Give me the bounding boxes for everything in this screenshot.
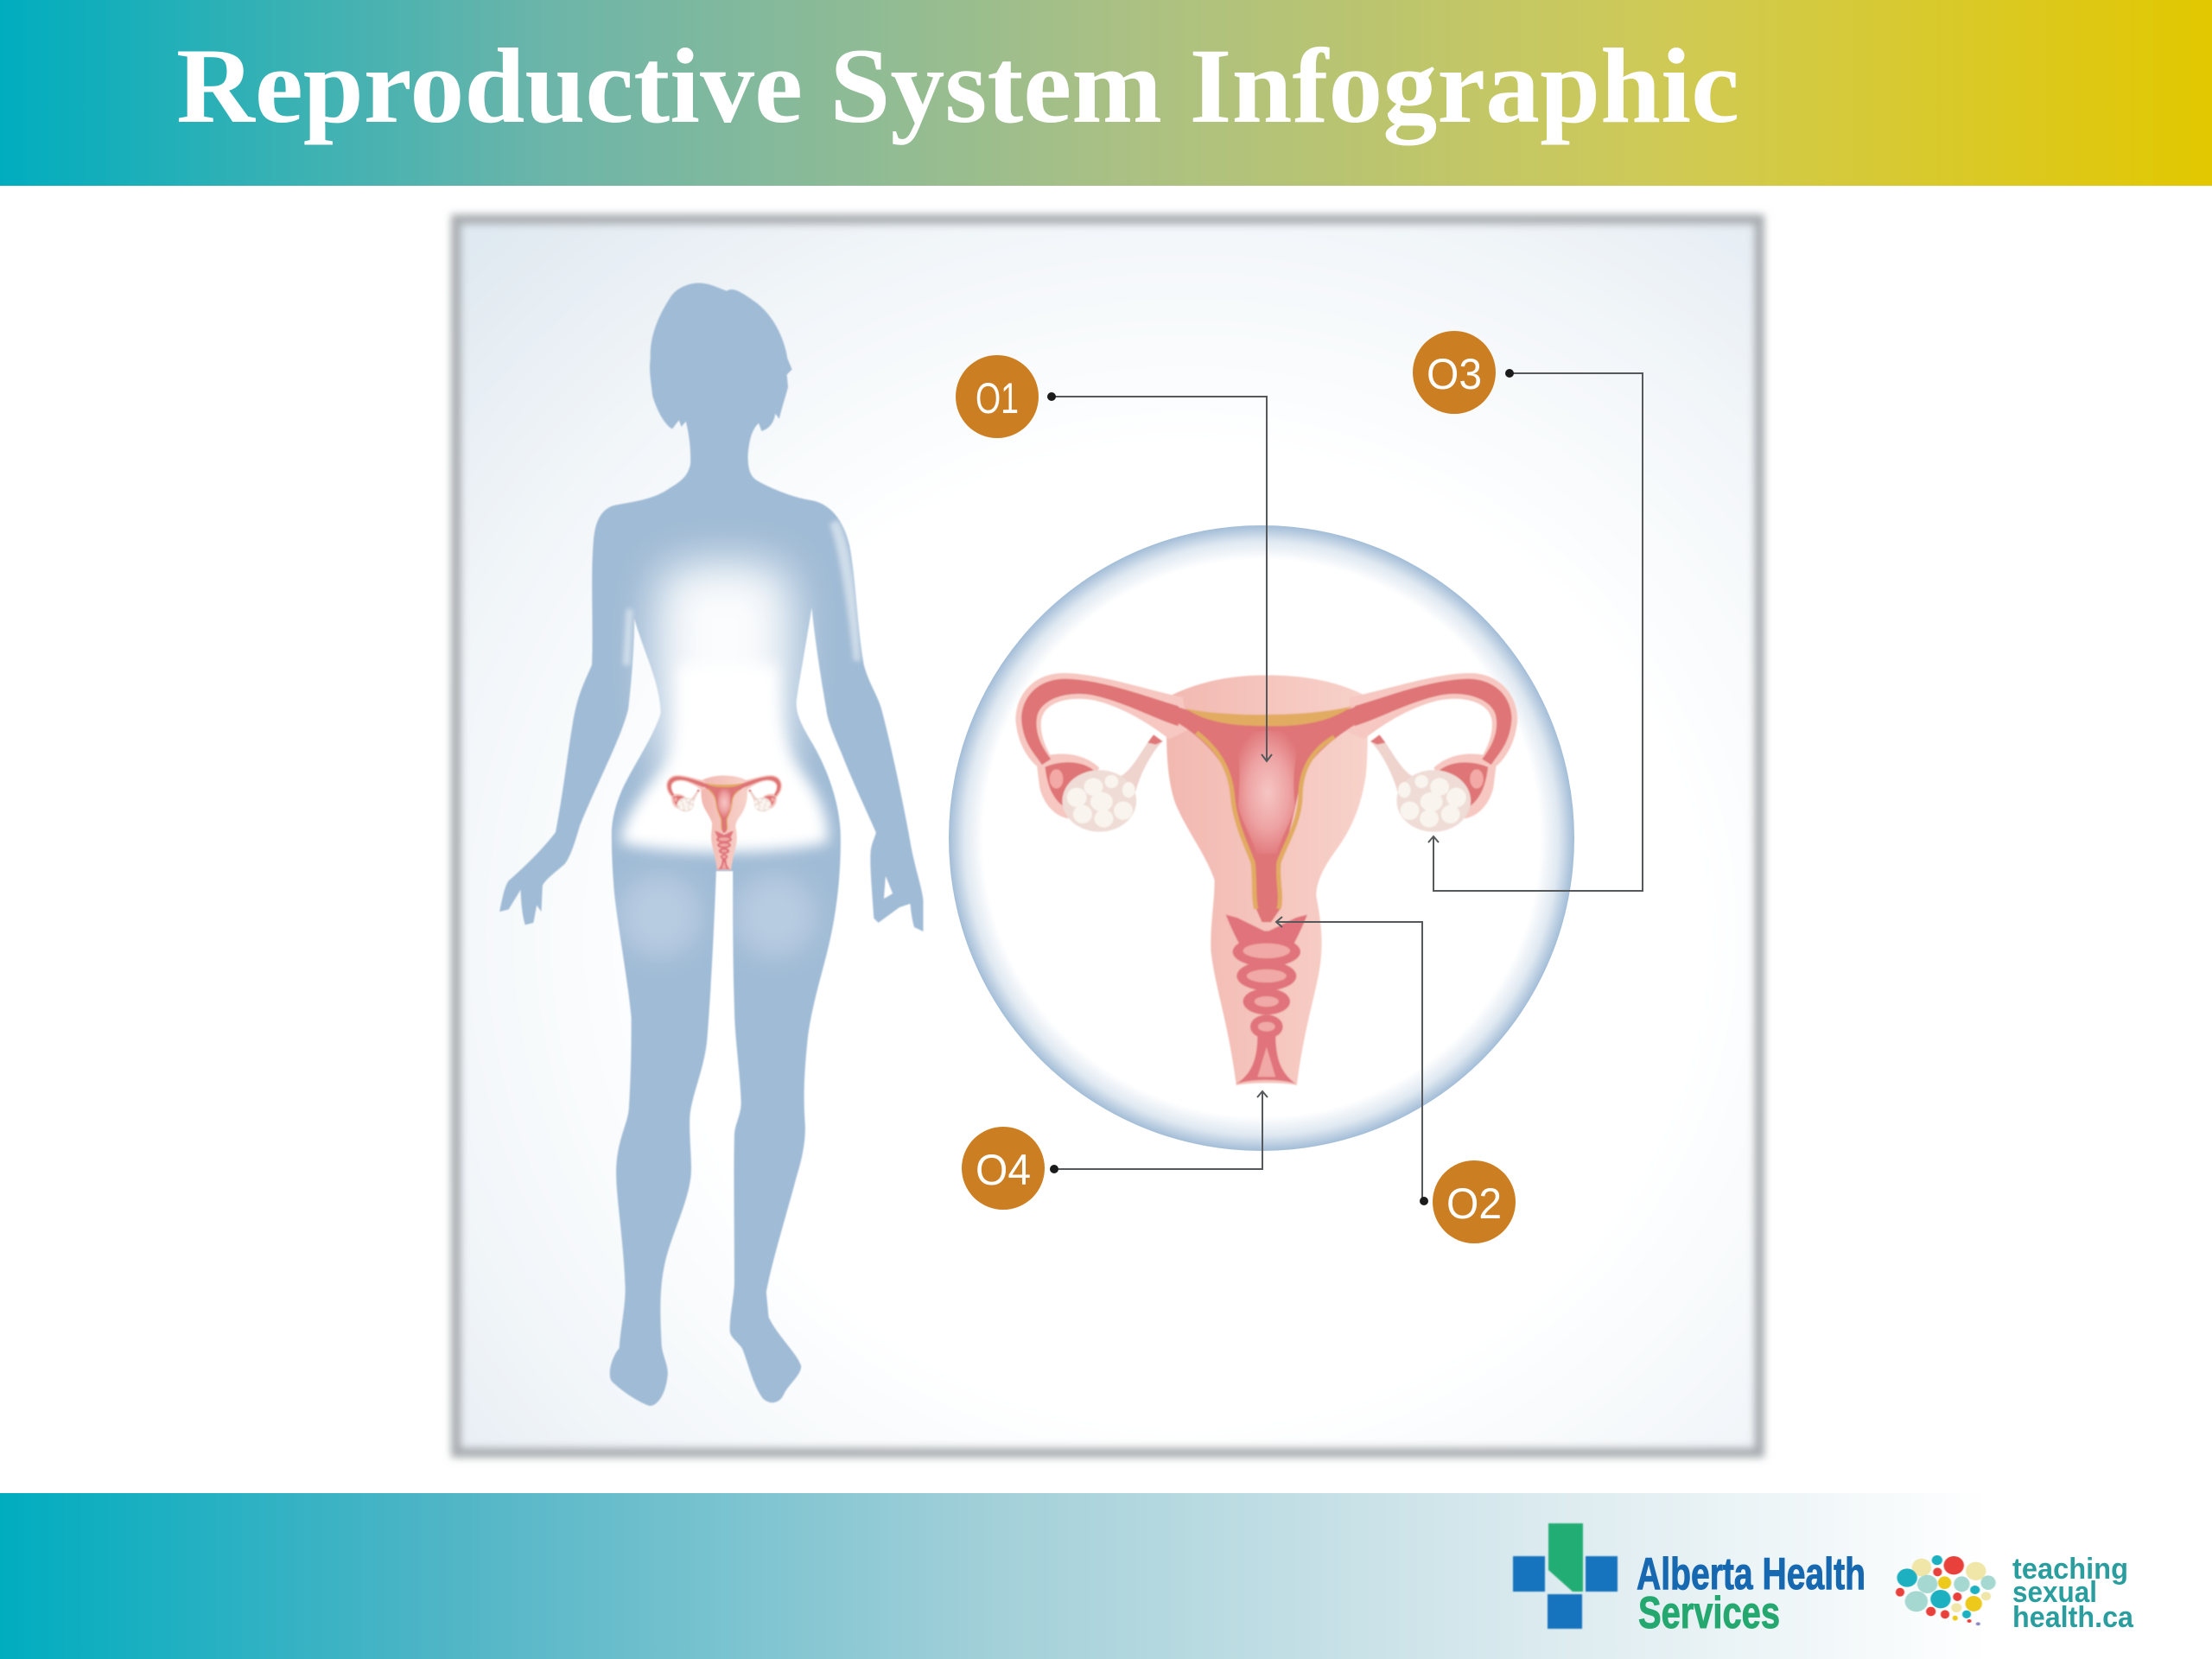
badge O2 [1433, 1160, 1516, 1243]
wordmark line 3: health.ca [2012, 1601, 2134, 1634]
badge O3: O3 [1427, 350, 1482, 398]
logo: teaching sexual health [1896, 1553, 2134, 1634]
figure: female body silhouette [499, 283, 923, 1406]
connector: O2 to cervix [1276, 917, 1428, 1205]
footer banner [0, 1493, 2212, 1659]
mini uterus inside the silhouette [666, 775, 782, 870]
logo: Alberta Health Services [1513, 1523, 1866, 1638]
header banner [0, 0, 2212, 186]
icon: AHS cross [1513, 1523, 1618, 1629]
badge O2: O2 [1446, 1179, 1502, 1228]
wordmark line 2: sexual [2012, 1576, 2097, 1609]
panel: illustration frame [456, 219, 1759, 1452]
badge O1: O1 [976, 374, 1019, 423]
enlarged view circle [949, 525, 1574, 1151]
badge O4 [962, 1127, 1045, 1210]
title: Reproductive System Infographic [176, 27, 1739, 146]
wordmark line 1: Alberta Health [1637, 1549, 1866, 1599]
connector: O3 to ovary [1428, 369, 1643, 891]
connector: O4 to vaginal opening [1050, 1091, 1268, 1173]
icon: brain of coloured dots [1896, 1555, 1996, 1625]
connector: O1 to uterus cavity [1047, 392, 1272, 761]
large uterus diagram [1015, 673, 1517, 1085]
badge O4: O4 [976, 1146, 1031, 1194]
wordmark line 1: teaching [2012, 1553, 2128, 1586]
badge O1 [956, 355, 1039, 438]
badge O3 [1413, 331, 1496, 414]
wordmark line 2: Services [1638, 1588, 1780, 1638]
